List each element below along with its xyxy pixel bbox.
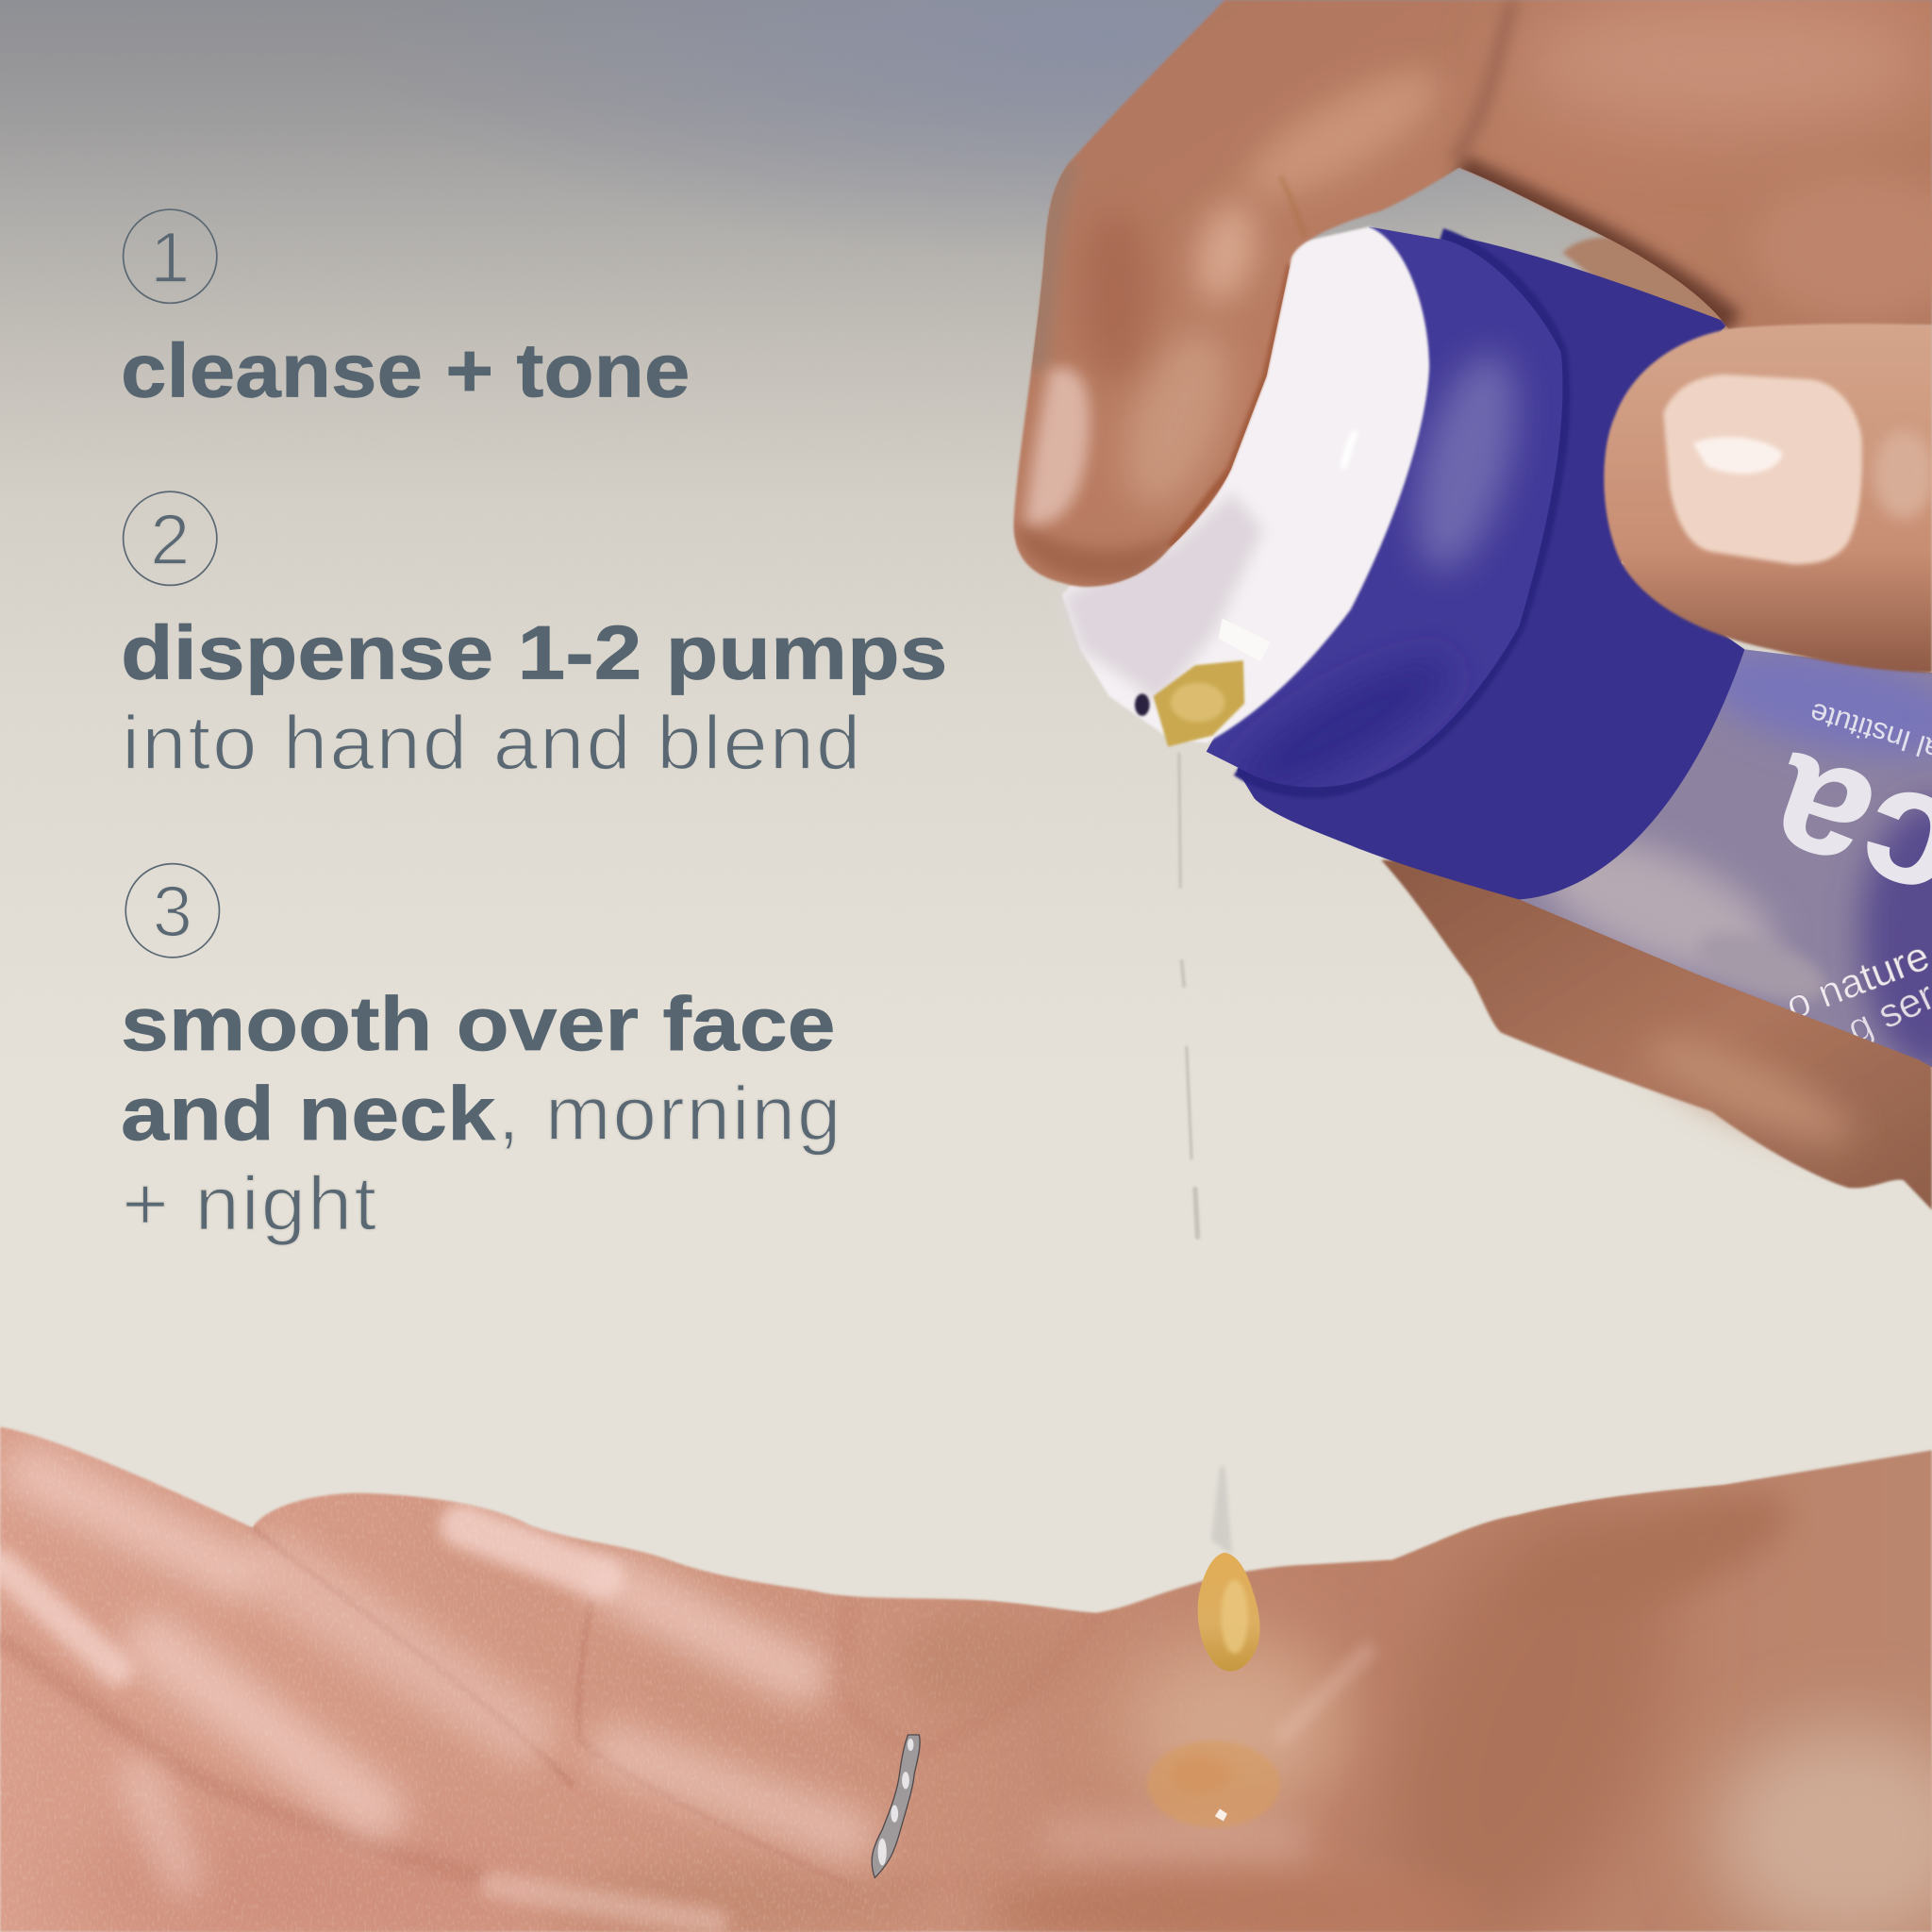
bottle bbox=[1195, 209, 1932, 1072]
cap highlight edge bbox=[1343, 431, 1356, 468]
text: into hand and blend: into hand and blend bbox=[122, 701, 862, 786]
index finger with nail bbox=[1604, 324, 1932, 673]
oil at nozzle bbox=[1154, 660, 1244, 747]
heading: cleanse + tone: cleanse + tone bbox=[121, 329, 690, 414]
number badge 3 bbox=[125, 864, 219, 958]
lower finger beneath bottle bbox=[1381, 860, 1932, 1210]
palm fold shadows bbox=[0, 1528, 1393, 1885]
faint stream above drop bbox=[1211, 1466, 1232, 1555]
bottle body dark purple bbox=[1237, 234, 1744, 899]
lower finger shadow bbox=[1458, 170, 1731, 326]
number badge 3: 3 bbox=[153, 873, 192, 953]
skin sheen texture bbox=[0, 1417, 1356, 1932]
oil pool on palm bbox=[1147, 1741, 1280, 1827]
text: morning: , morning bbox=[498, 1072, 842, 1157]
heading: and neck: and neck bbox=[121, 1072, 496, 1157]
number badge 1: 1 bbox=[150, 218, 190, 298]
finger highlights bbox=[1187, 195, 1266, 309]
white pump cap bbox=[1062, 226, 1429, 747]
ring bbox=[872, 1735, 920, 1878]
fingertip nail area bbox=[1025, 368, 1090, 525]
fingertip right highlight bbox=[1874, 430, 1932, 519]
finger dark edge bbox=[1014, 456, 1239, 583]
ring stones bbox=[878, 1739, 913, 1865]
step 2 bbox=[121, 491, 947, 786]
heading: smooth over face: smooth over face bbox=[121, 982, 836, 1067]
nozzle tab bbox=[1219, 619, 1271, 661]
step 3 bbox=[121, 864, 842, 1247]
number badge 1 bbox=[124, 209, 217, 303]
upper hand bbox=[1014, 0, 1932, 587]
lower finger highlight bbox=[1638, 1021, 1862, 1160]
cap lilac shadow bbox=[1062, 492, 1263, 702]
label text: nature: o nature bbox=[1780, 933, 1932, 1029]
cap contact shadow bbox=[1171, 265, 1291, 547]
knuckle crease bbox=[1454, 0, 1513, 160]
text: + night: + night bbox=[122, 1162, 378, 1247]
oil stream bbox=[1179, 754, 1198, 1237]
step 1 bbox=[121, 209, 690, 414]
palm darker tones bbox=[1332, 1463, 1724, 1932]
nail bbox=[1663, 375, 1862, 564]
nozzle hole bbox=[1135, 693, 1150, 716]
collar bbox=[1206, 226, 1562, 787]
bottle label bbox=[1516, 628, 1932, 1072]
finger dark patch bbox=[1080, 209, 1150, 382]
wedge of skin behind bottle bbox=[1562, 238, 1738, 333]
number badge 2: 2 bbox=[150, 500, 190, 580]
joint crease bbox=[1280, 176, 1305, 237]
palm glossy highlights bbox=[0, 1473, 1368, 1923]
nail highlight bbox=[1693, 437, 1783, 474]
background gradient bbox=[0, 0, 1932, 798]
heading: dispense 1-2 pumps: dispense 1-2 pumps bbox=[121, 611, 947, 696]
number badge 2 bbox=[124, 491, 217, 585]
oil highlight bbox=[1171, 683, 1224, 722]
finger outer edge tone bbox=[1035, 164, 1068, 370]
collar groove bbox=[1237, 234, 1564, 791]
lower hand bbox=[0, 1417, 1932, 1932]
oil drop bbox=[1198, 1553, 1260, 1672]
